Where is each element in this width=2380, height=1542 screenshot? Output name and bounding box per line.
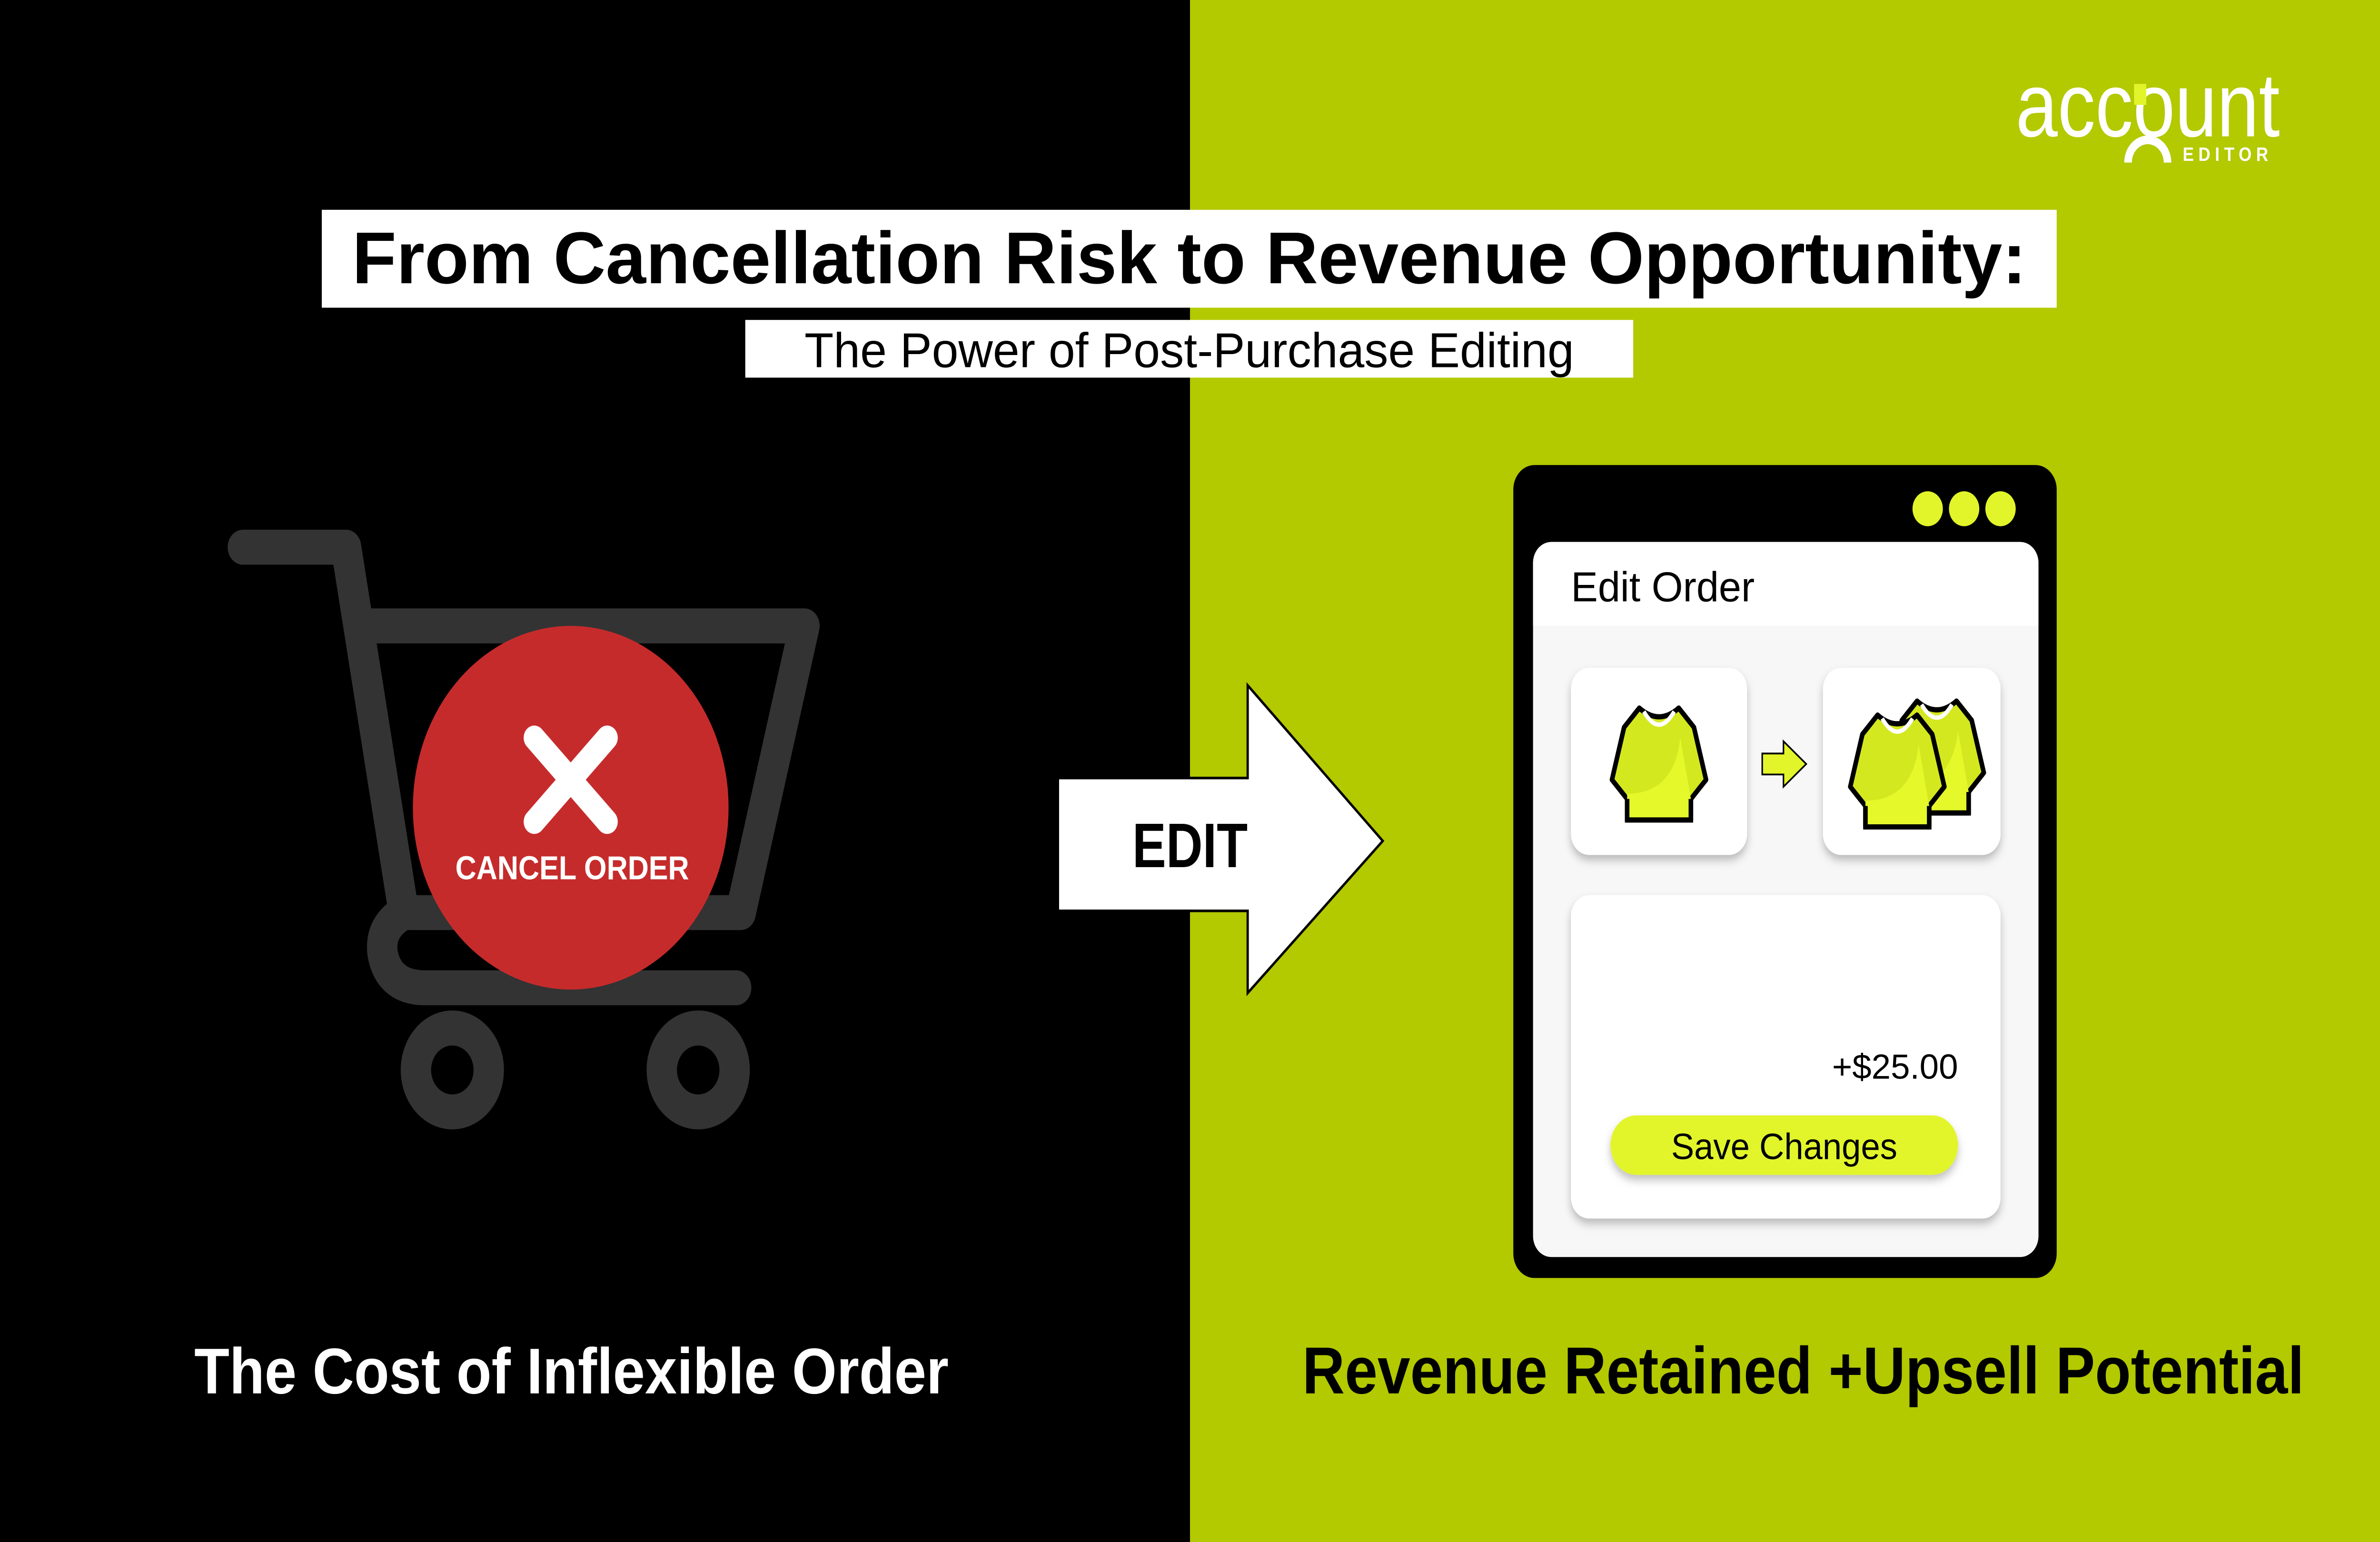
card: two shirts <box>1823 668 2001 855</box>
logo: account <box>2016 54 2280 156</box>
button: save changes <box>1610 1116 1958 1175</box>
cancel order badge <box>413 626 729 989</box>
card: single shirt <box>1571 668 1747 855</box>
cancel order badge: CANCEL ORDER <box>456 850 689 887</box>
arrow: edit <box>1058 685 1383 993</box>
title: From Cancellation Risk to Revenue Opportunity: <box>352 217 2026 299</box>
panel: edit order window <box>1513 465 2057 1278</box>
caption left: The Cost of Inflexible Order <box>194 1335 949 1407</box>
logo: EDITOR <box>2182 144 2273 166</box>
card: summary <box>1571 895 2001 1218</box>
caption right: Revenue Retained +Upsell Potential <box>1302 1334 2304 1408</box>
subtitle: The Power of Post-Purchase Editing <box>804 324 1574 378</box>
button: save changes: Save Changes <box>1671 1127 1897 1167</box>
icon: small arrow <box>1762 741 1806 787</box>
heading: edit order: Edit Order <box>1571 564 1755 611</box>
background right <box>1190 0 2380 1542</box>
icon: shopping cart <box>243 547 804 1112</box>
window dots <box>1913 491 2016 526</box>
arrow: edit: EDIT <box>1132 811 1248 881</box>
card: summary: +$25.00 <box>1832 1047 1958 1087</box>
background left <box>0 0 1190 1542</box>
